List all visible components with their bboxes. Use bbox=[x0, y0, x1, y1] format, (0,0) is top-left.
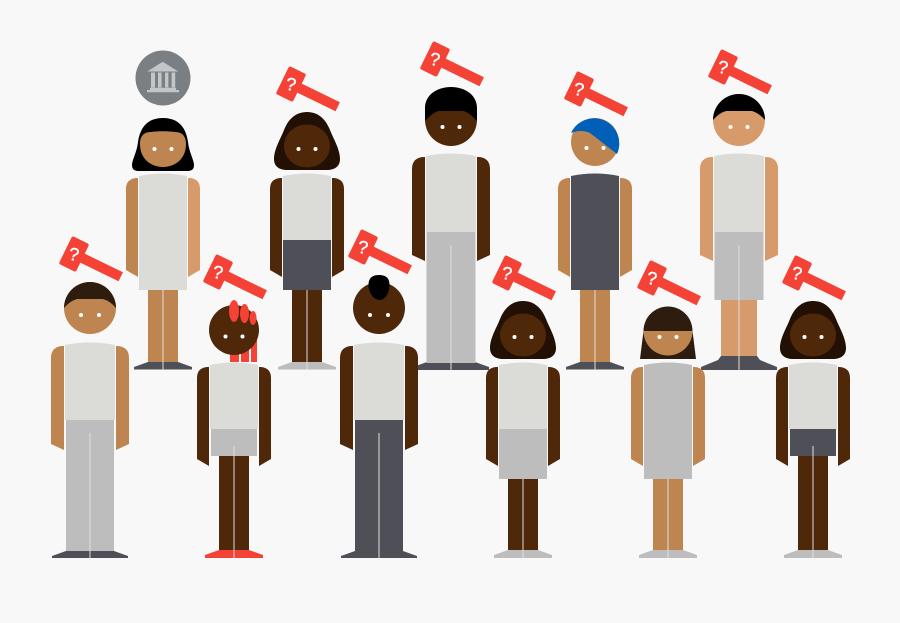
face bbox=[571, 118, 619, 166]
face bbox=[209, 305, 259, 355]
legs bbox=[508, 479, 538, 551]
arms bbox=[776, 367, 850, 466]
head wrap bbox=[571, 118, 619, 154]
person: front row woman with dark shorts bbox=[776, 301, 850, 558]
shirt bbox=[354, 342, 404, 420]
shoes bbox=[494, 550, 552, 558]
person: back row woman with blue head wrap bbox=[558, 118, 632, 370]
fingers over head bbox=[229, 300, 256, 325]
shoes bbox=[52, 551, 128, 558]
legs bbox=[219, 456, 249, 552]
eyes bbox=[368, 313, 390, 317]
raised red hand bbox=[230, 322, 257, 362]
icon: gavel 1 bbox=[59, 236, 128, 291]
hair bbox=[132, 118, 194, 171]
arms bbox=[340, 346, 418, 450]
icon: gavel 6: ? bbox=[790, 263, 804, 284]
icon: gavel 3 bbox=[348, 229, 417, 284]
icon: gavel 7: ? bbox=[284, 74, 298, 95]
icon: gavel 8: ? bbox=[428, 49, 442, 70]
dress bbox=[139, 174, 187, 290]
shoes bbox=[784, 550, 842, 558]
hair bbox=[425, 87, 477, 121]
hair bbox=[490, 301, 556, 359]
eyes bbox=[728, 125, 750, 129]
icon: gavel 4 bbox=[492, 255, 561, 310]
face bbox=[425, 94, 477, 146]
person: back row woman with dark skirt bbox=[270, 112, 344, 370]
shorts bbox=[714, 232, 764, 300]
skirt bbox=[499, 429, 547, 479]
eyes bbox=[440, 125, 462, 129]
shorts bbox=[790, 429, 836, 456]
eyes bbox=[802, 335, 824, 339]
legs bbox=[798, 456, 828, 551]
person: front row man with grey trousers bbox=[51, 282, 129, 558]
left arm bbox=[126, 178, 138, 277]
hair bbox=[274, 112, 340, 170]
arms bbox=[197, 367, 271, 466]
person: front row figure with raised red hand bbox=[197, 300, 271, 558]
shirt bbox=[283, 174, 331, 240]
icon: gavel 9: ? bbox=[572, 79, 586, 100]
icon: gavel 10 bbox=[708, 49, 777, 104]
arms bbox=[270, 178, 344, 277]
shirt bbox=[210, 362, 258, 429]
icon: gavel 5: ? bbox=[645, 268, 659, 289]
right arm bbox=[188, 178, 200, 277]
face bbox=[64, 282, 116, 334]
hair bbox=[713, 94, 765, 120]
shirt bbox=[714, 154, 764, 232]
arms bbox=[51, 346, 129, 450]
shoes bbox=[639, 550, 697, 558]
icon: gavel 6 bbox=[782, 255, 851, 310]
dress bbox=[644, 362, 692, 479]
legs bbox=[148, 290, 178, 363]
red shoes bbox=[205, 550, 263, 558]
shoes bbox=[278, 362, 336, 370]
arms bbox=[486, 367, 560, 466]
eyes bbox=[512, 335, 534, 339]
shirt bbox=[65, 342, 115, 420]
legs bbox=[580, 290, 610, 363]
eyes bbox=[79, 313, 101, 317]
arms bbox=[700, 157, 778, 261]
person: back row woman with black hair bbox=[126, 118, 200, 370]
person: front row woman with grey skirt bbox=[486, 301, 560, 558]
icon: gavel 4: ? bbox=[500, 263, 514, 284]
shorts bbox=[211, 429, 257, 456]
face bbox=[140, 131, 186, 167]
icon: gavel 2 bbox=[203, 254, 272, 309]
hair bbox=[64, 282, 116, 308]
eyes bbox=[296, 147, 318, 151]
face bbox=[284, 124, 330, 168]
skirt bbox=[283, 240, 331, 290]
arms bbox=[558, 178, 632, 277]
legs bbox=[721, 300, 757, 358]
shoes bbox=[413, 362, 489, 370]
arms bbox=[631, 367, 705, 466]
legs bbox=[292, 290, 322, 363]
eyes bbox=[152, 147, 174, 151]
icon: gavel 5 bbox=[637, 260, 706, 315]
person: back row tall man with grey trousers bbox=[412, 87, 490, 370]
shirt bbox=[789, 362, 837, 429]
person: front row man with bun and dark trousers bbox=[340, 275, 418, 558]
arms bbox=[412, 157, 490, 261]
person: front row woman with grey dress bbox=[631, 306, 705, 558]
trousers bbox=[66, 420, 114, 551]
icon: gavel 7 bbox=[276, 66, 345, 121]
shoes bbox=[566, 362, 624, 370]
hair bun bbox=[368, 275, 390, 300]
trousers bbox=[426, 232, 476, 363]
legs bbox=[653, 479, 683, 551]
shoes bbox=[134, 362, 192, 370]
icon: gavel 2: ? bbox=[211, 262, 225, 283]
shoes bbox=[341, 546, 417, 558]
shoes bbox=[701, 356, 777, 370]
face bbox=[353, 282, 405, 334]
trousers bbox=[355, 420, 403, 551]
shirt bbox=[499, 362, 547, 429]
icon: gavel 10: ? bbox=[716, 57, 730, 78]
icon: gavel 1: ? bbox=[67, 244, 81, 265]
hair bbox=[640, 306, 696, 359]
eyes bbox=[584, 146, 606, 150]
hair bbox=[780, 301, 846, 359]
icon: gavel 3: ? bbox=[356, 237, 370, 258]
dress bbox=[571, 174, 619, 290]
face bbox=[500, 314, 546, 356]
shirt bbox=[426, 154, 476, 232]
eyes bbox=[224, 334, 244, 338]
face bbox=[644, 331, 692, 356]
face bbox=[713, 94, 765, 146]
face bbox=[790, 314, 836, 356]
icon: gavel 8 bbox=[420, 41, 489, 96]
icon: gavel 9 bbox=[564, 71, 633, 126]
person: back row man with shorts bbox=[700, 94, 778, 370]
eyes bbox=[658, 335, 678, 339]
icon: bank building bbox=[136, 50, 190, 106]
